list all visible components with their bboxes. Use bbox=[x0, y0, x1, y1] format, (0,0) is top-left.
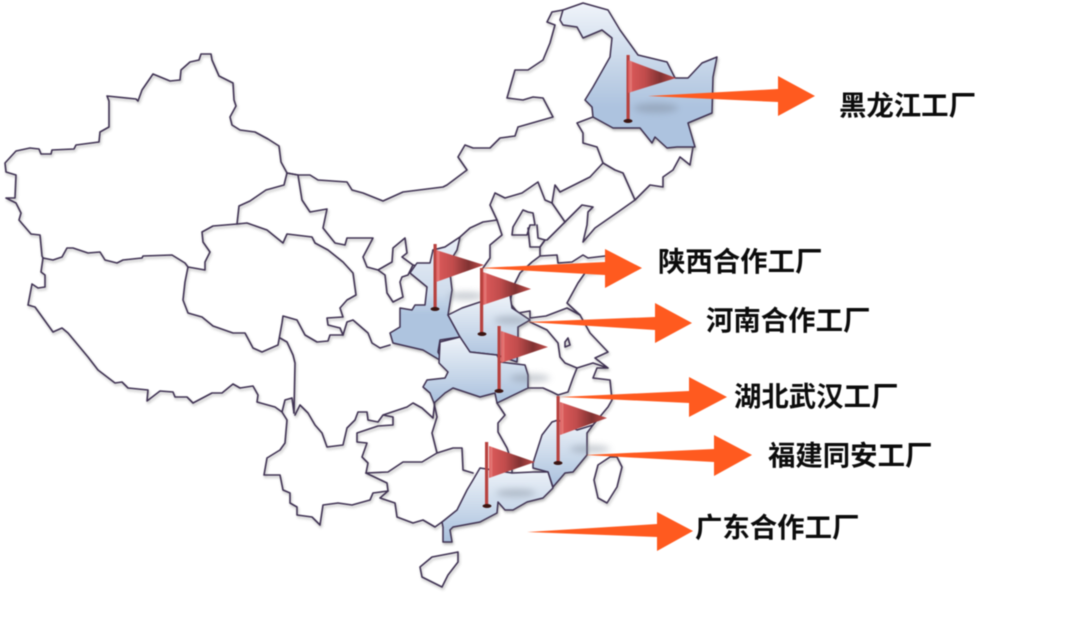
arrow: Guangdong bbox=[527, 512, 693, 551]
map of China: unhighlighted province boundaries bbox=[5, 10, 693, 587]
highlighted provinces bbox=[390, 3, 717, 542]
Taiwan bbox=[594, 457, 622, 503]
arrow: Heilongjiang bbox=[648, 76, 815, 116]
label: Heilongjiang factory: 黑龙江工厂 bbox=[839, 90, 976, 121]
province: Hubei bbox=[423, 337, 528, 403]
province: Henan bbox=[448, 295, 530, 362]
Inner Mongolia northern boundary bbox=[287, 10, 563, 201]
Inner Mongolia southern boundary bbox=[432, 117, 603, 262]
province: Fujian bbox=[533, 420, 593, 487]
flag: Shaanxi bbox=[430, 244, 484, 311]
Xinjiang boundary bbox=[5, 54, 287, 258]
Anhui, Jiangsu and Zhejiang boundary bbox=[510, 303, 612, 425]
Hunan and Guangxi boundary bbox=[366, 403, 473, 527]
Sichuan, Guizhou and Chongqing boundary bbox=[295, 400, 435, 473]
province: Guangdong bbox=[442, 468, 553, 542]
flag: Henan bbox=[478, 268, 531, 336]
label: Guangdong partner factory: 广东合作工厂 bbox=[695, 512, 859, 543]
Tibet and Sichuan divider bbox=[280, 338, 295, 413]
Qinghai and Sichuan boundary bbox=[183, 267, 390, 352]
arrow: Henan bbox=[527, 303, 692, 343]
Hainan bbox=[420, 552, 458, 587]
province: Shaanxi bbox=[390, 237, 460, 362]
arrow: Fujian bbox=[585, 435, 752, 476]
Yunnan boundary bbox=[264, 412, 388, 525]
Gansu, Ningxia and Inner Mongolia boundary bbox=[287, 173, 432, 302]
Jilin and Liaoning boundary bbox=[552, 147, 693, 242]
label: Henan partner factory: 河南合作工厂 bbox=[706, 305, 870, 336]
province: Heilongjiang bbox=[560, 3, 717, 148]
label: Fujian Tong'an factory: 福建同安工厂 bbox=[768, 440, 932, 471]
flag: Guangdong bbox=[482, 442, 536, 508]
Shanxi, Hebei and Shandong boundary bbox=[483, 220, 605, 315]
flag: Heilongjiang bbox=[624, 55, 678, 123]
Tianjin boundary bbox=[528, 225, 545, 247]
arrow: Hubei bbox=[560, 377, 727, 417]
arrow: Shaanxi bbox=[480, 249, 642, 288]
flag: Hubei bbox=[494, 326, 550, 393]
label: Shaanxi partner factory: 陕西合作工厂 bbox=[658, 246, 822, 277]
Beijing boundary bbox=[512, 210, 535, 235]
Jiangxi boundary bbox=[497, 368, 577, 473]
Qinghai and Tibet northern boundary bbox=[43, 223, 356, 335]
Tibet boundary bbox=[28, 258, 294, 413]
flag: Fujian bbox=[554, 396, 610, 465]
label: Hubei Wuhan factory: 湖北武汉工厂 bbox=[734, 381, 898, 412]
